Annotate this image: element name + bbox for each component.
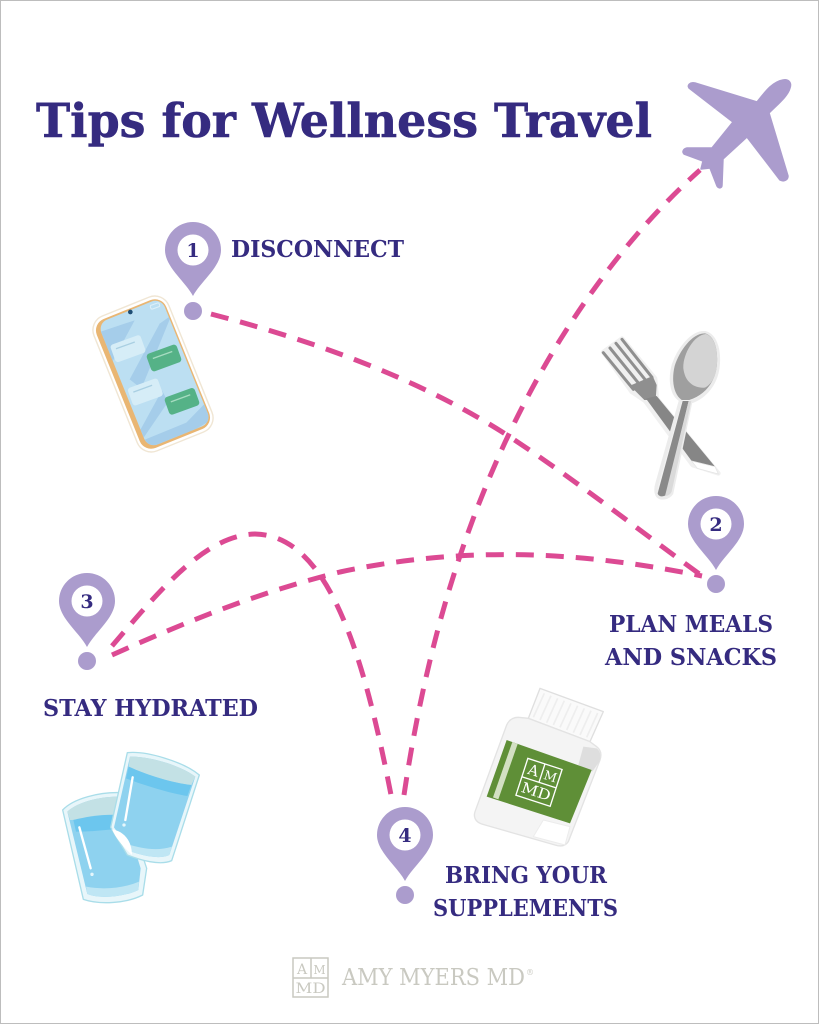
back glass bbox=[111, 752, 199, 863]
pin 3: 3 bbox=[80, 591, 94, 613]
icon: supplement bottle: A bbox=[525, 761, 541, 781]
label: plan meals and snacks bbox=[604, 611, 777, 671]
title: Tips for Wellness Travel bbox=[36, 94, 652, 149]
icon: airplane bbox=[683, 80, 791, 188]
spoon bbox=[656, 333, 718, 498]
front glass bbox=[63, 793, 147, 903]
icon: fork and spoon bbox=[603, 333, 718, 498]
logo: M bbox=[313, 963, 326, 977]
pin 3 bbox=[59, 573, 115, 670]
logo: A bbox=[296, 962, 308, 978]
label: bring your supplements bbox=[433, 862, 618, 922]
label: disconnect: DISCONNECT bbox=[231, 236, 404, 263]
icon: water glasses bbox=[63, 752, 199, 903]
label: bring your supplements: SUPPLEMENTS bbox=[433, 895, 618, 922]
icon: supplement bottle: M bbox=[542, 767, 559, 786]
logo: MD bbox=[296, 981, 326, 997]
pin 4: 4 bbox=[398, 825, 412, 847]
icon: supplement bottle bbox=[474, 688, 603, 846]
pin 2 bbox=[688, 496, 744, 593]
pin 4 bbox=[377, 807, 433, 904]
label: plan meals and snacks: AND SNACKS bbox=[604, 644, 777, 671]
label: bring your supplements: BRING YOUR bbox=[445, 862, 608, 889]
icon: supplement bottle: MD bbox=[519, 779, 553, 805]
icon: phone bbox=[88, 291, 218, 457]
fork bbox=[603, 339, 718, 474]
logo: ® bbox=[526, 968, 534, 977]
pin 1 bbox=[165, 222, 221, 320]
logo: AMY MYERS MD bbox=[341, 965, 525, 991]
label: stay hydrated: STAY HYDRATED bbox=[43, 695, 258, 722]
label: plan meals and snacks: PLAN MEALS bbox=[609, 611, 773, 638]
logo bbox=[293, 958, 534, 997]
dashed route paths bbox=[112, 170, 705, 800]
pin 2: 2 bbox=[709, 514, 723, 536]
pin 1: 1 bbox=[186, 240, 200, 262]
